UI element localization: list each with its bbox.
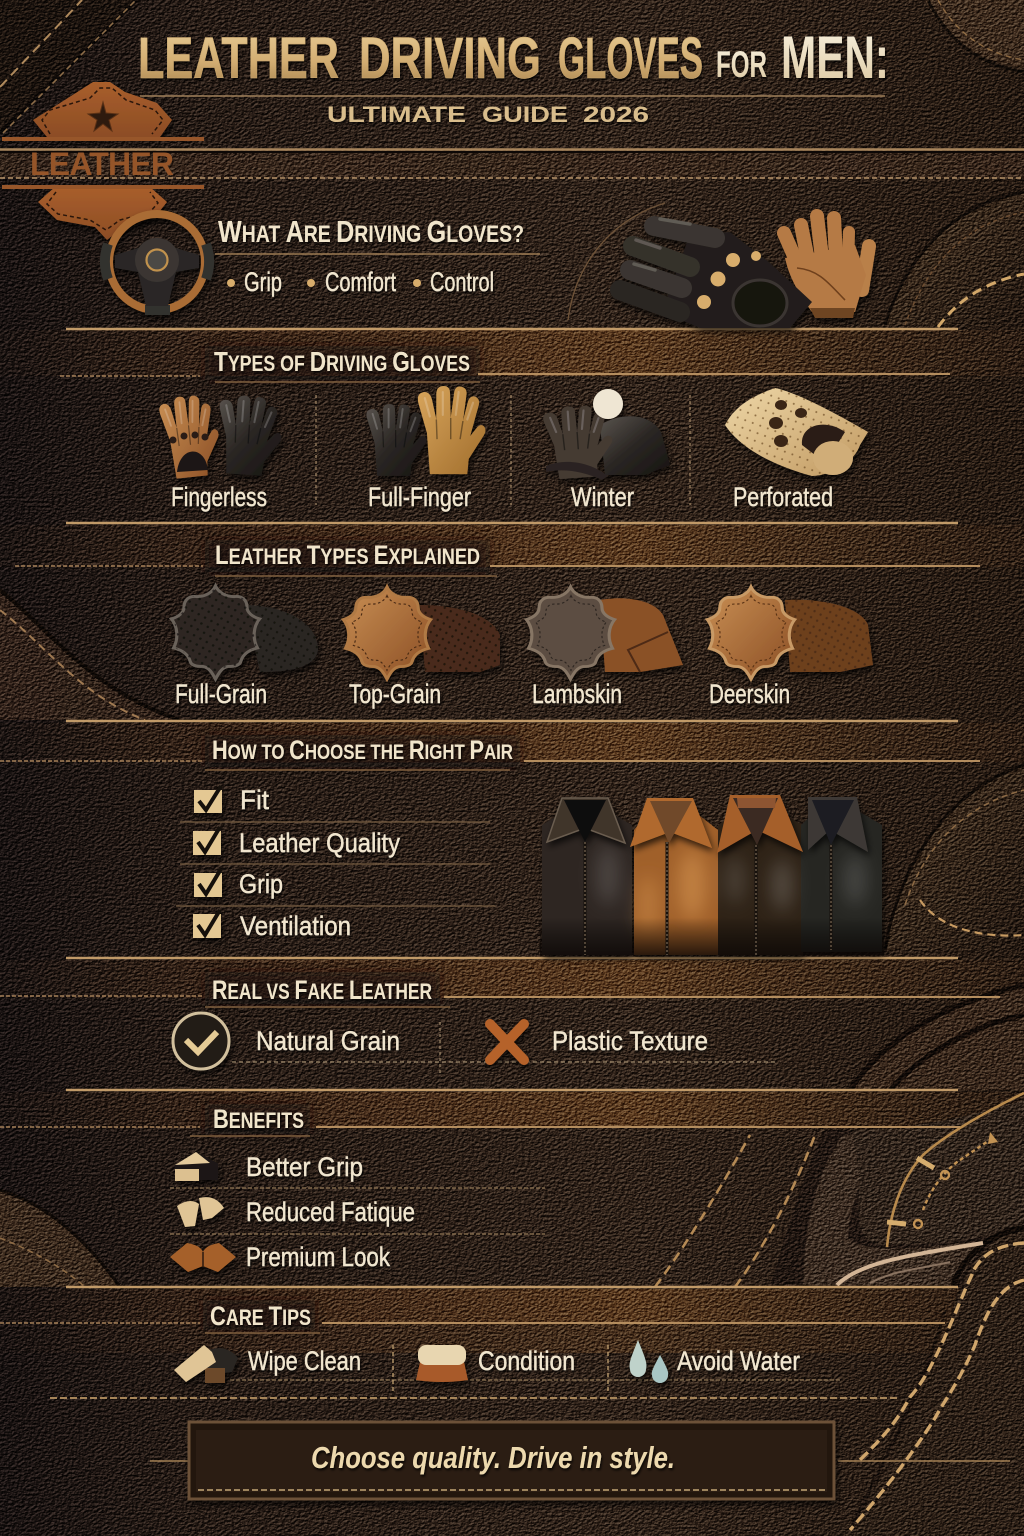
icon: wipe clean [174,1345,238,1383]
title: FOR [716,44,767,85]
checklist: Grip [239,869,283,899]
section header: CARE TIPS [210,1301,311,1331]
section header: TYPES OF DRIVING GLOVES [214,346,470,377]
item: deerskin [707,587,873,709]
illustration: gloves [620,216,869,328]
section header [0,735,980,770]
item: fingerless [158,393,284,512]
subtitle: GUIDE [482,102,568,127]
section header: HOW TO CHOOSE THE RIGHT PAIR [212,735,513,765]
title block [138,24,889,127]
section header [0,972,1000,1007]
benefit label: Better Grip [246,1152,363,1182]
panel: benefits [0,1104,960,1272]
title [138,24,889,91]
checklist [176,785,495,941]
item: lambskin: Lambskin [532,679,622,709]
section header: BENEFITS [213,1104,304,1134]
item: winter [542,389,670,512]
item: full-grain [171,586,318,709]
callout: closing tagline: Choose quality. Drive in style. [311,1440,675,1475]
subtitle: ULTIMATE [327,102,466,127]
section header [0,1300,945,1333]
icon: check circle [173,1013,229,1069]
item: top-grain [343,587,500,709]
item: full-grain: Full-Grain [175,679,267,709]
item: perforated [725,388,868,512]
panel: care tips [0,1300,945,1398]
item: top-grain: Top-Grain [349,679,441,709]
icon: premium look [170,1243,236,1272]
title: DRIVING [359,26,541,91]
section header [60,346,950,382]
checklist: Fit [240,785,269,815]
icon: star [88,102,118,131]
section header: LEATHER TYPES EXPLAINED [215,540,480,570]
leather badge [2,82,204,240]
bullet list: Comfort [325,267,396,297]
item: deerskin: Deerskin [709,679,790,709]
panel: real vs fake leather [0,972,1000,1076]
title: GLOVES [558,26,703,91]
subtitle: 2026 [583,102,649,127]
badge word: LEATHER [30,146,174,182]
section header: REAL VS FAKE LEATHER [212,975,432,1005]
tip label: Wipe Clean [248,1346,361,1376]
title: MEN: [781,24,889,91]
item: full-finger [366,386,485,512]
heading: WHAT ARE DRIVING GLOVES? [218,214,524,249]
tip label: Condition [478,1346,575,1376]
item: perforated: Perforated [733,482,833,512]
subtitle [327,102,649,127]
bullet list: Grip [244,267,282,297]
item: full-finger: Full-Finger [368,482,471,512]
panel: how to choose the right pair [0,735,980,955]
tip label: Avoid Water [677,1346,800,1376]
icon: steering wheel [105,214,209,310]
illustration: leather jackets [540,795,884,955]
bullet list [227,267,494,297]
benefit label: Reduced Fatique [246,1197,415,1227]
benefit label: Premium Look [246,1242,390,1272]
icon: cross [490,1024,524,1060]
section header [0,1104,960,1136]
panel: types of driving gloves [60,346,950,512]
icon: reduced fatigue [177,1197,224,1227]
bullet list: Control [430,267,494,297]
title: LEATHER [138,26,339,91]
checklist: Leather Quality [239,828,400,858]
icon: water drops [629,1340,668,1383]
callout: closing tagline [150,1422,1010,1499]
item: fingerless: Fingerless [171,482,267,512]
fake label: Plastic Texture [552,1026,708,1056]
real label: Natural Grain [256,1026,400,1056]
item: lambskin [526,587,683,709]
checklist: Ventilation [240,911,351,941]
icon: condition brush [416,1345,468,1382]
item: winter: Winter [571,482,634,512]
section header [15,540,980,576]
gold divider lines [0,150,1024,1287]
panel: what are driving gloves [105,203,869,328]
panel: leather types explained [15,540,980,709]
icon: better grip [175,1152,218,1181]
